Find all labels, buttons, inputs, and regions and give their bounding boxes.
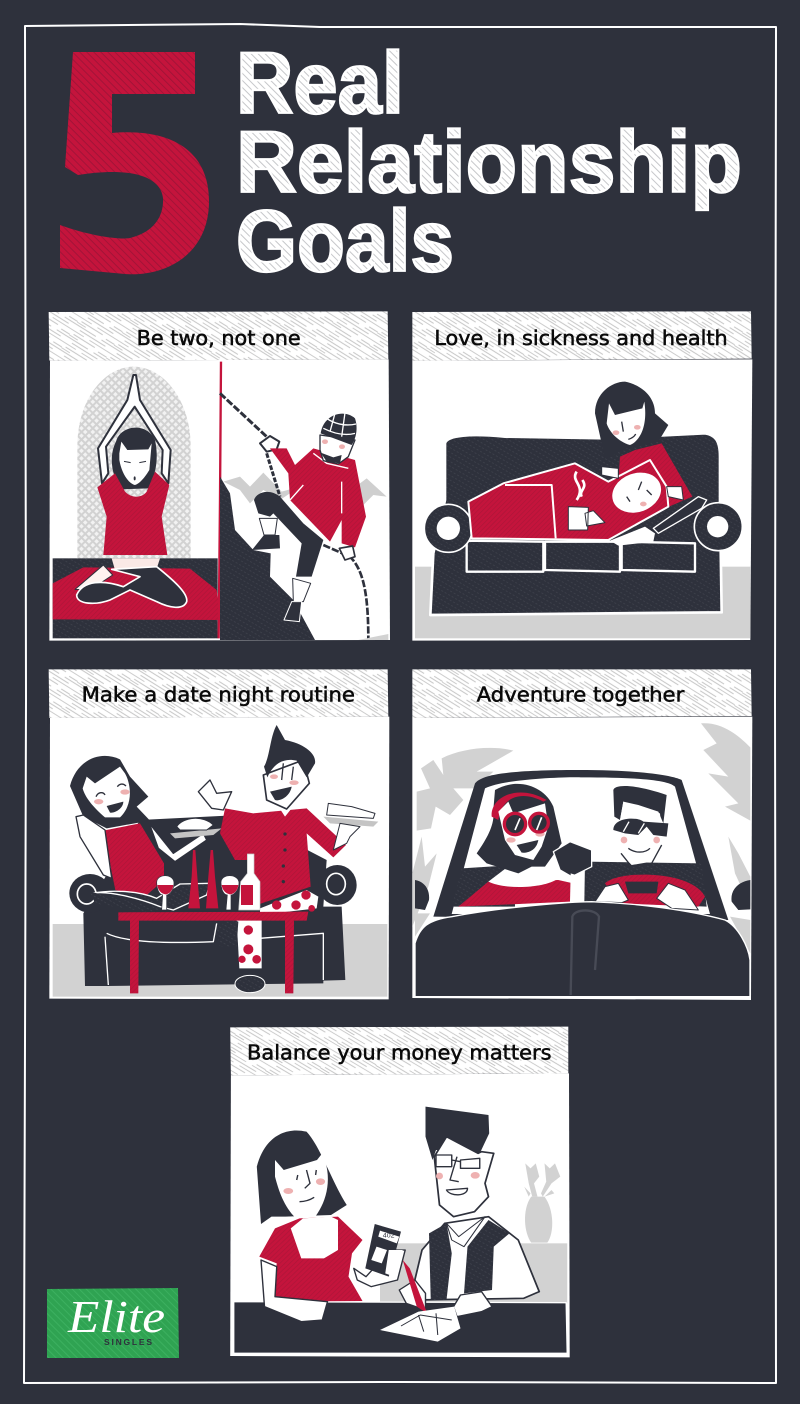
title text: Goals xyxy=(236,193,454,290)
leaves xyxy=(412,723,750,953)
date night scene xyxy=(53,725,387,997)
panel header xyxy=(412,311,752,361)
logo background xyxy=(47,1288,179,1358)
panel: Make a date night routine xyxy=(49,669,389,999)
woman with calculator: 402 xyxy=(383,1232,395,1239)
table xyxy=(234,1302,567,1353)
title text: Relationship xyxy=(236,114,742,211)
panel header xyxy=(412,669,752,718)
panel header xyxy=(230,1027,568,1075)
big number 5 xyxy=(60,52,209,274)
panel body xyxy=(49,717,389,999)
logo wordmark: Elite xyxy=(67,1291,165,1342)
climber scene xyxy=(220,393,388,640)
panel body xyxy=(412,717,752,1000)
heading: Be two, not one xyxy=(137,326,301,350)
title text: Real xyxy=(236,35,404,132)
divider xyxy=(219,362,221,638)
panel header xyxy=(49,311,388,361)
car scene xyxy=(415,770,750,997)
heading: Balance your money matters xyxy=(247,1040,552,1064)
title text xyxy=(236,35,742,290)
vase and wall xyxy=(380,1163,567,1303)
couch scene xyxy=(415,382,750,638)
logo: Elite Singles xyxy=(47,1288,179,1358)
yoga scene xyxy=(53,367,222,638)
heading: Love, in sickness and health xyxy=(434,326,728,350)
man with pen xyxy=(380,1107,539,1342)
panel header xyxy=(49,669,388,718)
panel: Be two, not one xyxy=(49,311,390,641)
panel body xyxy=(412,359,752,641)
heading: Make a date night routine xyxy=(82,683,355,707)
woman with calculator xyxy=(257,1130,405,1322)
panel body xyxy=(230,1073,570,1357)
title block xyxy=(60,35,742,290)
panel: Love, in sickness and health xyxy=(412,311,752,641)
logo subtitle: SINGLES xyxy=(104,1337,152,1347)
heading: Adventure together xyxy=(477,683,685,707)
panel: Balance your money matters xyxy=(230,1027,570,1357)
panel: Adventure together xyxy=(412,669,752,1000)
panel body xyxy=(49,359,390,641)
